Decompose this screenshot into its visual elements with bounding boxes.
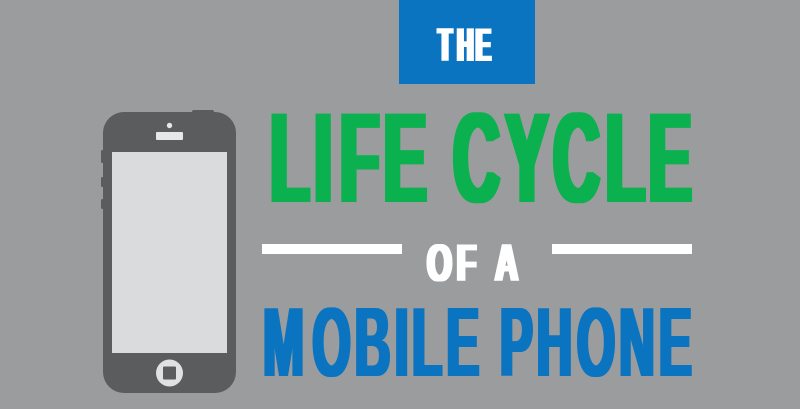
banner: THE: THE — [438, 17, 491, 71]
phone top button — [192, 110, 214, 118]
phone speaker — [156, 132, 183, 140]
subheading: OF A with rules — [262, 234, 692, 293]
phone camera — [167, 123, 172, 128]
icon: mobile phone — [101, 110, 236, 393]
phone home button — [156, 360, 183, 386]
phone side buttons — [101, 150, 106, 209]
phone screen — [112, 152, 227, 353]
phone body — [103, 112, 236, 393]
heading: LIFE CYCLE: LIFE CYCLE — [270, 86, 692, 230]
banner: THE — [399, 0, 535, 84]
heading: MOBILE PHONE: MOBILE PHONE — [263, 289, 692, 398]
subheading: OF A with rules: OF A — [427, 234, 518, 293]
